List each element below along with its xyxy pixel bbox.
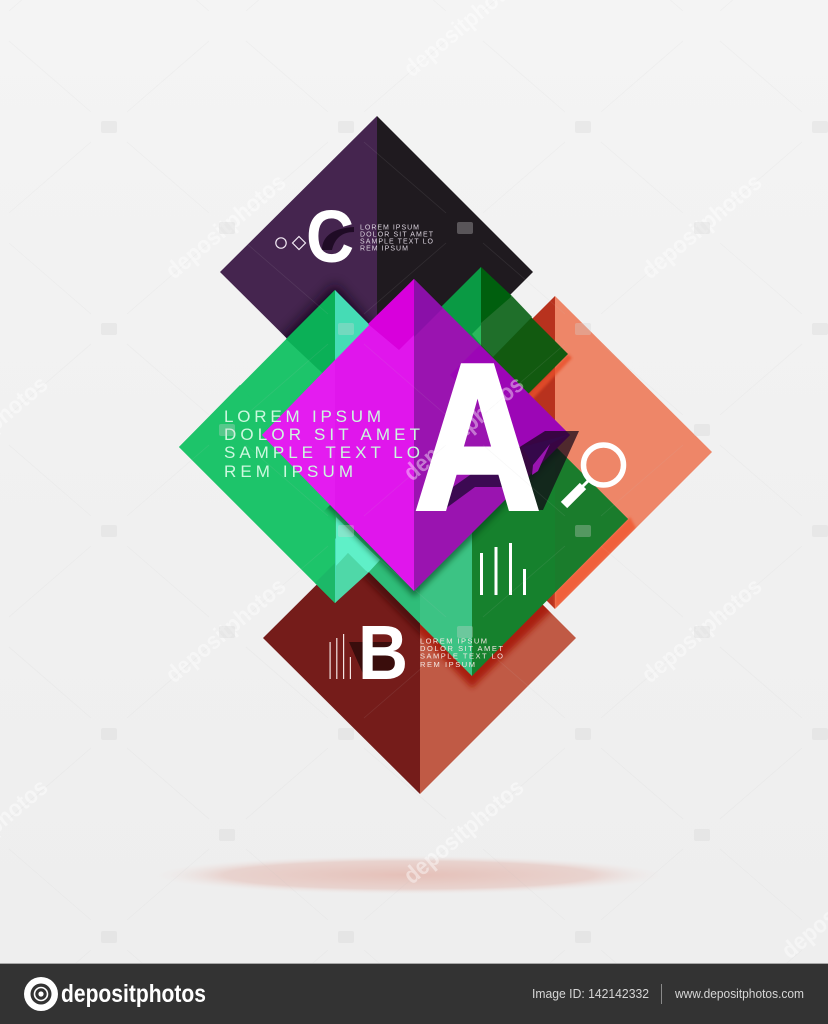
text block: lorem ipsum large: REM IPSUM xyxy=(224,462,353,481)
text block: lorem ipsum B xyxy=(420,636,503,669)
text block: lorem ipsum C: LOREM IPSUM xyxy=(360,224,419,232)
text block: lorem ipsum B: SAMPLE TEXT LO xyxy=(420,652,503,660)
letter A shadow xyxy=(445,431,579,510)
letter C: C xyxy=(306,195,354,278)
website: www.depositphotos.com xyxy=(674,987,804,1001)
watermarks: depositphotos xyxy=(637,573,767,689)
logo icon xyxy=(24,977,58,1011)
text block: lorem ipsum large: LOREM IPSUM xyxy=(224,407,381,426)
text block: lorem ipsum large xyxy=(224,407,420,481)
diamond B xyxy=(263,572,576,794)
watermarks: depositphotos xyxy=(161,169,291,285)
icon: circle and diamond xyxy=(276,236,306,250)
icon: bars B xyxy=(330,634,351,679)
text block: lorem ipsum B: LOREM IPSUM xyxy=(420,636,487,646)
text block: lorem ipsum B: REM IPSUM xyxy=(420,660,475,669)
icon: bar chart xyxy=(480,543,526,595)
magenta diamond xyxy=(262,279,570,591)
text block: lorem ipsum C: REM IPSUM xyxy=(360,246,408,252)
watermark camera icons xyxy=(101,121,828,943)
text block: lorem ipsum large: DOLOR SIT AMET xyxy=(224,425,420,444)
letter A: A xyxy=(415,323,540,552)
left green diamond xyxy=(179,290,491,603)
logo wordmark: depositphotos xyxy=(61,980,206,1008)
text block: lorem ipsum large: SAMPLE TEXT LO xyxy=(224,443,420,462)
icon: magnifying glass xyxy=(564,445,624,505)
floor shadow xyxy=(144,855,674,895)
text block: lorem ipsum C: DOLOR SIT AMET xyxy=(360,232,434,238)
text block: lorem ipsum B: DOLOR SIT AMET xyxy=(420,644,503,653)
text block: lorem ipsum C: SAMPLE TEXT LO xyxy=(360,238,434,246)
image id: Image ID: 142142332 xyxy=(532,987,649,1001)
watermarks: depositphotos xyxy=(399,371,529,487)
watermarks: depositphotos xyxy=(161,573,291,689)
footer bar xyxy=(0,963,828,1024)
letter B: B xyxy=(358,610,408,696)
watermarks: depositphotos xyxy=(637,169,767,285)
watermarks: depositphotos xyxy=(399,774,529,890)
small green diamond xyxy=(394,267,568,441)
diamond salmon xyxy=(528,296,712,609)
centre green diamond xyxy=(179,385,628,676)
text block: lorem ipsum C xyxy=(360,224,434,252)
diamond C xyxy=(220,116,533,338)
footer divider xyxy=(661,984,662,1004)
